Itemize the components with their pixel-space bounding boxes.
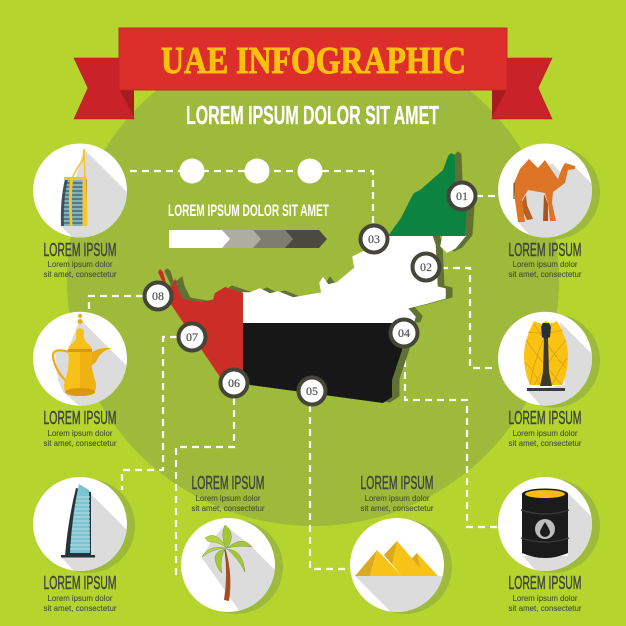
panel: golden pineapple monument [498,312,600,447]
black band [243,323,402,403]
marker 02: 02 [420,260,432,274]
label: LOREM IPSUM [192,473,264,493]
white band [243,236,465,323]
subtitle: LOREM IPSUM DOLOR SIT AMET [186,100,439,130]
description: Lorem ipsum dolor [512,428,578,438]
progress arrow [169,230,327,248]
marker 01: 01 [456,189,468,203]
marker 01 [448,182,476,210]
icon: sail hotel [61,149,88,226]
marker 08 [144,282,172,310]
marker 06 [220,370,248,396]
panel: camel: sit amet, consectetur [508,269,582,279]
panel: coffee pot: sit amet, consectetur [44,438,117,448]
panel: pyramids: sit amet, consectetur [360,503,434,513]
description: Lorem ipsum dolor [48,593,113,603]
right ribbon tail [492,58,552,119]
label: LOREM IPSUM [44,240,116,260]
red band [158,269,243,377]
panel: Burj Al Arab [33,144,127,278]
panel: oil barrel [498,477,600,612]
marker 07 [178,324,206,350]
marker 03: 03 [368,232,380,246]
marker 06: 06 [228,376,240,390]
panel: Burj Al Arab: sit amet, consectetur [44,269,117,279]
marker 04 [390,320,418,346]
map of UAE [158,152,474,403]
marker 04: 04 [398,326,410,340]
label: LOREM IPSUM [44,408,116,428]
icon: monument [524,321,568,391]
description: Lorem ipsum dolor [364,493,430,503]
title: UAE INFOGRAPHIC [161,40,466,82]
marker 03 [360,226,388,252]
connector lines [89,171,497,575]
secondary heading: LOREM IPSUM DOLOR SIT AMET [168,201,329,220]
panel: camel [498,144,600,278]
green band [388,153,467,236]
panel: palm tree [181,476,283,614]
timeline dots [180,158,322,184]
marker 07: 07 [186,330,198,344]
icon: pyramids [355,541,438,576]
icon: barrel [521,488,569,558]
map shadow [165,152,474,402]
icon: camel [514,159,575,222]
description: Lorem ipsum dolor [48,428,113,438]
ribbon folds [119,89,507,117]
label: LOREM IPSUM [44,573,116,593]
description: Lorem ipsum dolor [48,259,113,269]
marker 05 [298,378,326,404]
marker 08: 08 [152,289,164,303]
panel: skyscraper [33,477,140,613]
panel: palm tree: sit amet, consectetur [192,503,265,513]
label: LOREM IPSUM [360,473,434,493]
panel: skyscraper: sit amet, consectetur [44,603,117,613]
oil drop badge [535,519,555,539]
icon: palm [202,525,252,601]
panel: golden pineapple monument: sit amet, consectetur [508,438,582,448]
marker 02 [412,254,440,280]
ribbon main [119,28,507,90]
numbered markers [144,182,476,404]
description: Lorem ipsum dolor [196,493,261,503]
icon: dallah [53,314,112,396]
panel: pyramids [350,473,452,626]
panel: oil barrel: sit amet, consectetur [508,603,582,613]
icon: tower [61,484,95,558]
banner [74,28,552,119]
large central circle [67,34,559,526]
description: Lorem ipsum dolor [512,259,578,269]
marker 05: 05 [306,384,318,398]
panel: coffee pot [33,312,127,447]
left ribbon tail [74,58,134,119]
description: Lorem ipsum dolor [512,593,578,603]
